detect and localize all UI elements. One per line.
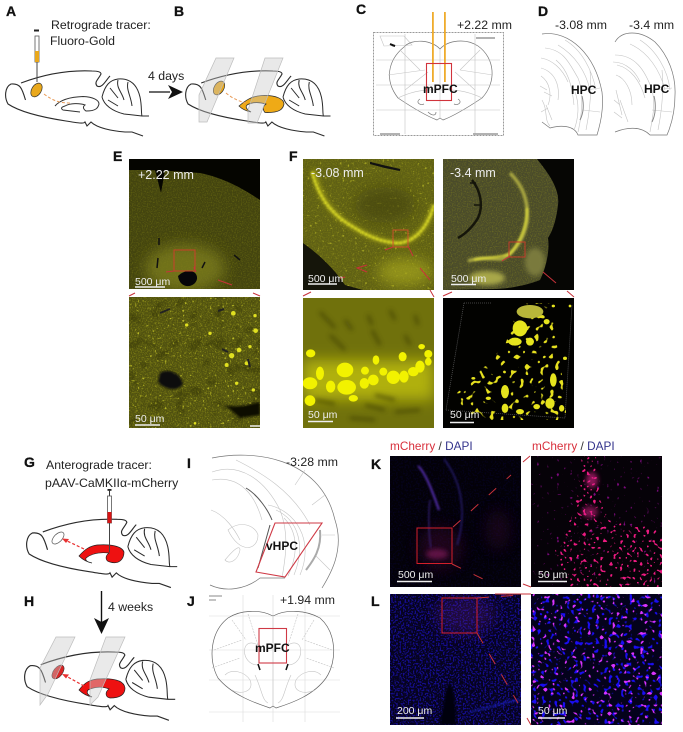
vHPC label: vHPC bbox=[266, 539, 298, 553]
hippocampus outline bbox=[55, 96, 99, 112]
coordinate: -3.08 mm bbox=[311, 166, 364, 180]
icon: brain outline bbox=[27, 519, 177, 588]
arrow: tracer route bbox=[226, 93, 246, 103]
micrograph K overview bbox=[390, 456, 521, 587]
HPC labels: HPC bbox=[571, 83, 597, 97]
coordinate: -3.4 mm bbox=[450, 166, 496, 180]
caption left: mCherry / DAPI bbox=[390, 439, 473, 453]
arrow: projection bbox=[66, 676, 84, 686]
arrow: 4 weeks: 4 weeks bbox=[108, 600, 153, 614]
panel K and L headers bbox=[390, 439, 615, 453]
coordinate -3.4: -3.4 mm bbox=[629, 18, 674, 32]
label D: D bbox=[538, 3, 548, 19]
electrode tracks bbox=[432, 12, 446, 82]
caption: Fluoro-Gold: Fluoro-Gold bbox=[50, 34, 115, 48]
panel E: label E: E bbox=[113, 148, 122, 164]
panel H: anterograde labelling bbox=[24, 593, 175, 720]
vHPC box bbox=[256, 523, 322, 577]
micrograph L magnified bbox=[531, 594, 662, 725]
arrow: 4 weeks bbox=[94, 591, 153, 634]
micrograph F -3.4 overview bbox=[443, 159, 574, 290]
HPC labels bbox=[571, 82, 670, 97]
caption: tracer: Retrograde tracer: bbox=[51, 18, 151, 32]
scale bar: 50 μm bbox=[135, 413, 165, 425]
hippocampus filled bbox=[239, 95, 284, 113]
target site outline bbox=[50, 530, 66, 546]
mPFC label: mPFC bbox=[255, 641, 290, 655]
zoom guide lines K bbox=[523, 456, 531, 587]
injection site bbox=[211, 79, 227, 97]
panel F: label F: F bbox=[289, 148, 298, 164]
HPC labels: HPC bbox=[644, 82, 670, 96]
red box bbox=[174, 250, 195, 271]
coordinate: +2.22 mm bbox=[457, 18, 512, 32]
mPFC box bbox=[259, 628, 286, 663]
caption: tracer: Anterograde tracer: bbox=[46, 458, 152, 472]
hippocampus red bbox=[79, 545, 124, 563]
red box bbox=[442, 598, 477, 633]
red box bbox=[417, 528, 452, 564]
label J: J bbox=[187, 593, 195, 609]
panel D: atlas HPC bbox=[538, 3, 675, 135]
red box bbox=[509, 242, 525, 257]
mPFC box bbox=[426, 64, 452, 100]
icon: brain outline bbox=[6, 71, 149, 136]
section plane 1 bbox=[40, 637, 75, 705]
coordinate: +1.94 mm bbox=[280, 593, 335, 607]
label A: A bbox=[6, 3, 16, 19]
micrograph F -3.08 overview bbox=[303, 159, 434, 292]
label C: C bbox=[356, 1, 366, 17]
label H: H bbox=[24, 593, 34, 609]
target site filled bbox=[50, 663, 66, 681]
caption: virus: pAAV-CaMKIIα-mCherry bbox=[45, 476, 179, 490]
zoom guide lines F1 bbox=[303, 290, 434, 297]
panel J: atlas mPFC bbox=[187, 593, 340, 722]
panel C: atlas mPFC bbox=[356, 1, 512, 136]
arrow: projection bbox=[65, 540, 84, 549]
icon: brain outline bbox=[186, 71, 330, 136]
arrow: tracer route bbox=[44, 94, 71, 103]
section plane 2 bbox=[248, 58, 283, 123]
panel B: retrograde labelling bbox=[174, 3, 330, 136]
zoom guide lines F2 bbox=[443, 291, 574, 297]
section plane 2 bbox=[90, 637, 125, 705]
atlas section -3.4 bbox=[613, 33, 675, 135]
micrograph E magnified bbox=[129, 297, 260, 428]
caption right: mCherry / DAPI bbox=[532, 439, 615, 453]
label I: I bbox=[187, 455, 191, 471]
label G: G bbox=[24, 454, 35, 470]
scale bar: 50 μm bbox=[450, 409, 480, 421]
micrograph F -3.4 3D reconstruction bbox=[443, 298, 574, 428]
label K: K bbox=[371, 456, 381, 472]
atlas section -3.08 bbox=[540, 34, 603, 135]
red box bbox=[393, 230, 408, 247]
injection site bbox=[28, 81, 45, 99]
atlas frame bbox=[374, 32, 504, 136]
panel G: anterograde tracer bbox=[24, 454, 179, 588]
arrow: 4 days bbox=[148, 69, 184, 99]
icon: brain outline bbox=[25, 652, 175, 720]
scale bar: 500 μm bbox=[451, 273, 486, 285]
icon: syringe bbox=[108, 489, 112, 552]
icon: syringe bbox=[34, 30, 39, 82]
hippocampus red bbox=[79, 679, 125, 698]
label L: L bbox=[371, 593, 380, 609]
label B: B bbox=[174, 3, 184, 19]
atlas section bbox=[210, 455, 338, 589]
scale bar: 50 μm bbox=[538, 569, 568, 581]
scale bar: 500 μm bbox=[308, 273, 343, 285]
panel I: atlas vHPC bbox=[187, 455, 338, 589]
scale bar: 50 μm bbox=[538, 705, 568, 717]
atlas section bbox=[209, 595, 340, 722]
scale bar: 50 μm bbox=[308, 409, 338, 421]
panel A: retrograde tracer injection bbox=[6, 3, 151, 136]
scale bar: 500 μm bbox=[135, 276, 170, 288]
arrow: 4 days: 4 days bbox=[148, 69, 184, 83]
micrograph E overview bbox=[129, 159, 260, 292]
atlas brain section bbox=[376, 34, 500, 134]
micrograph F -3.08 magnified bbox=[303, 298, 434, 428]
zoom guide lines L bbox=[495, 594, 531, 725]
section plane 1 bbox=[199, 58, 234, 122]
zoom guide lines E bbox=[129, 293, 260, 296]
micrograph K magnified bbox=[531, 456, 662, 587]
scale bar: 200 μm bbox=[397, 705, 432, 717]
mPFC label: mPFC bbox=[423, 82, 458, 96]
micrograph L overview bbox=[390, 594, 521, 725]
coordinate: +2.22 mm bbox=[138, 168, 194, 182]
coordinate: -3:28 mm bbox=[286, 455, 338, 469]
scale bar: 500 μm bbox=[398, 569, 433, 581]
coordinate -3.08: -3.08 mm bbox=[555, 18, 607, 32]
